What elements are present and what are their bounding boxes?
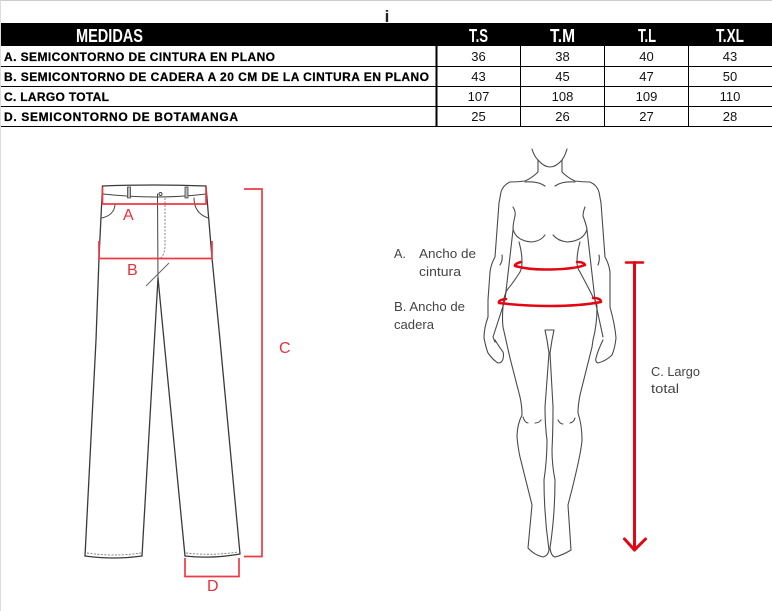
caption C: C. Largo	[651, 365, 700, 379]
caption B	[394, 300, 465, 332]
table grid	[1, 46, 772, 127]
table header: T.L	[638, 26, 656, 46]
row B: 45	[555, 69, 570, 84]
length arrow	[624, 262, 646, 550]
measure D: D	[207, 578, 219, 595]
caption C	[651, 365, 700, 396]
measure C: C	[279, 340, 291, 357]
measure B	[99, 241, 212, 279]
row A: 40	[639, 49, 654, 64]
table header: T.XL	[716, 26, 744, 46]
body outline	[484, 149, 616, 557]
caption A: Ancho de	[419, 247, 476, 261]
trousers diagram	[85, 185, 291, 595]
table header: T.S	[469, 26, 488, 46]
caption B: cadera	[394, 318, 434, 332]
row B: 47	[639, 69, 654, 84]
table header: MEDIDAS	[76, 26, 143, 46]
waist band	[515, 262, 585, 270]
measure A: A	[123, 207, 134, 224]
hip band	[499, 298, 601, 306]
size table	[1, 23, 772, 127]
body diagram	[394, 149, 700, 557]
row C: C. LARGO TOTAL	[4, 90, 109, 104]
measure C	[244, 189, 291, 556]
measure B: B	[127, 262, 138, 279]
row B	[4, 69, 737, 84]
measure D	[185, 558, 239, 595]
caption C: total	[651, 382, 679, 396]
table header	[1, 23, 772, 46]
measure A	[102, 187, 206, 224]
row A: 43	[723, 49, 737, 64]
row D: 25	[471, 109, 486, 124]
caption B: B. Ancho de	[394, 300, 465, 314]
row D: D. SEMICONTORNO DE BOTAMANGA	[4, 110, 238, 124]
row D: 27	[639, 109, 654, 124]
row C	[4, 89, 740, 104]
row C: 107	[468, 89, 489, 104]
row C: 108	[552, 89, 573, 104]
caption A: A.	[394, 247, 406, 261]
row D: 28	[723, 109, 737, 124]
row A	[4, 49, 737, 64]
trousers outline	[85, 185, 240, 558]
row D: 26	[555, 109, 570, 124]
row A: 36	[471, 49, 486, 64]
row A: 38	[555, 49, 570, 64]
caption A: cintura	[419, 265, 461, 279]
title mark: i	[385, 7, 389, 26]
table header: T.M	[550, 26, 575, 46]
row B: B. SEMICONTORNO DE CADERA A 20 CM DE LA CINTURA EN PLANO	[4, 70, 429, 84]
row C: 109	[636, 89, 657, 104]
row B: 43	[471, 69, 486, 84]
row D	[4, 109, 737, 124]
row B: 50	[723, 69, 737, 84]
caption A	[394, 247, 476, 279]
row A: A. SEMICONTORNO DE CINTURA EN PLANO	[4, 50, 275, 64]
row C: 110	[720, 89, 740, 104]
